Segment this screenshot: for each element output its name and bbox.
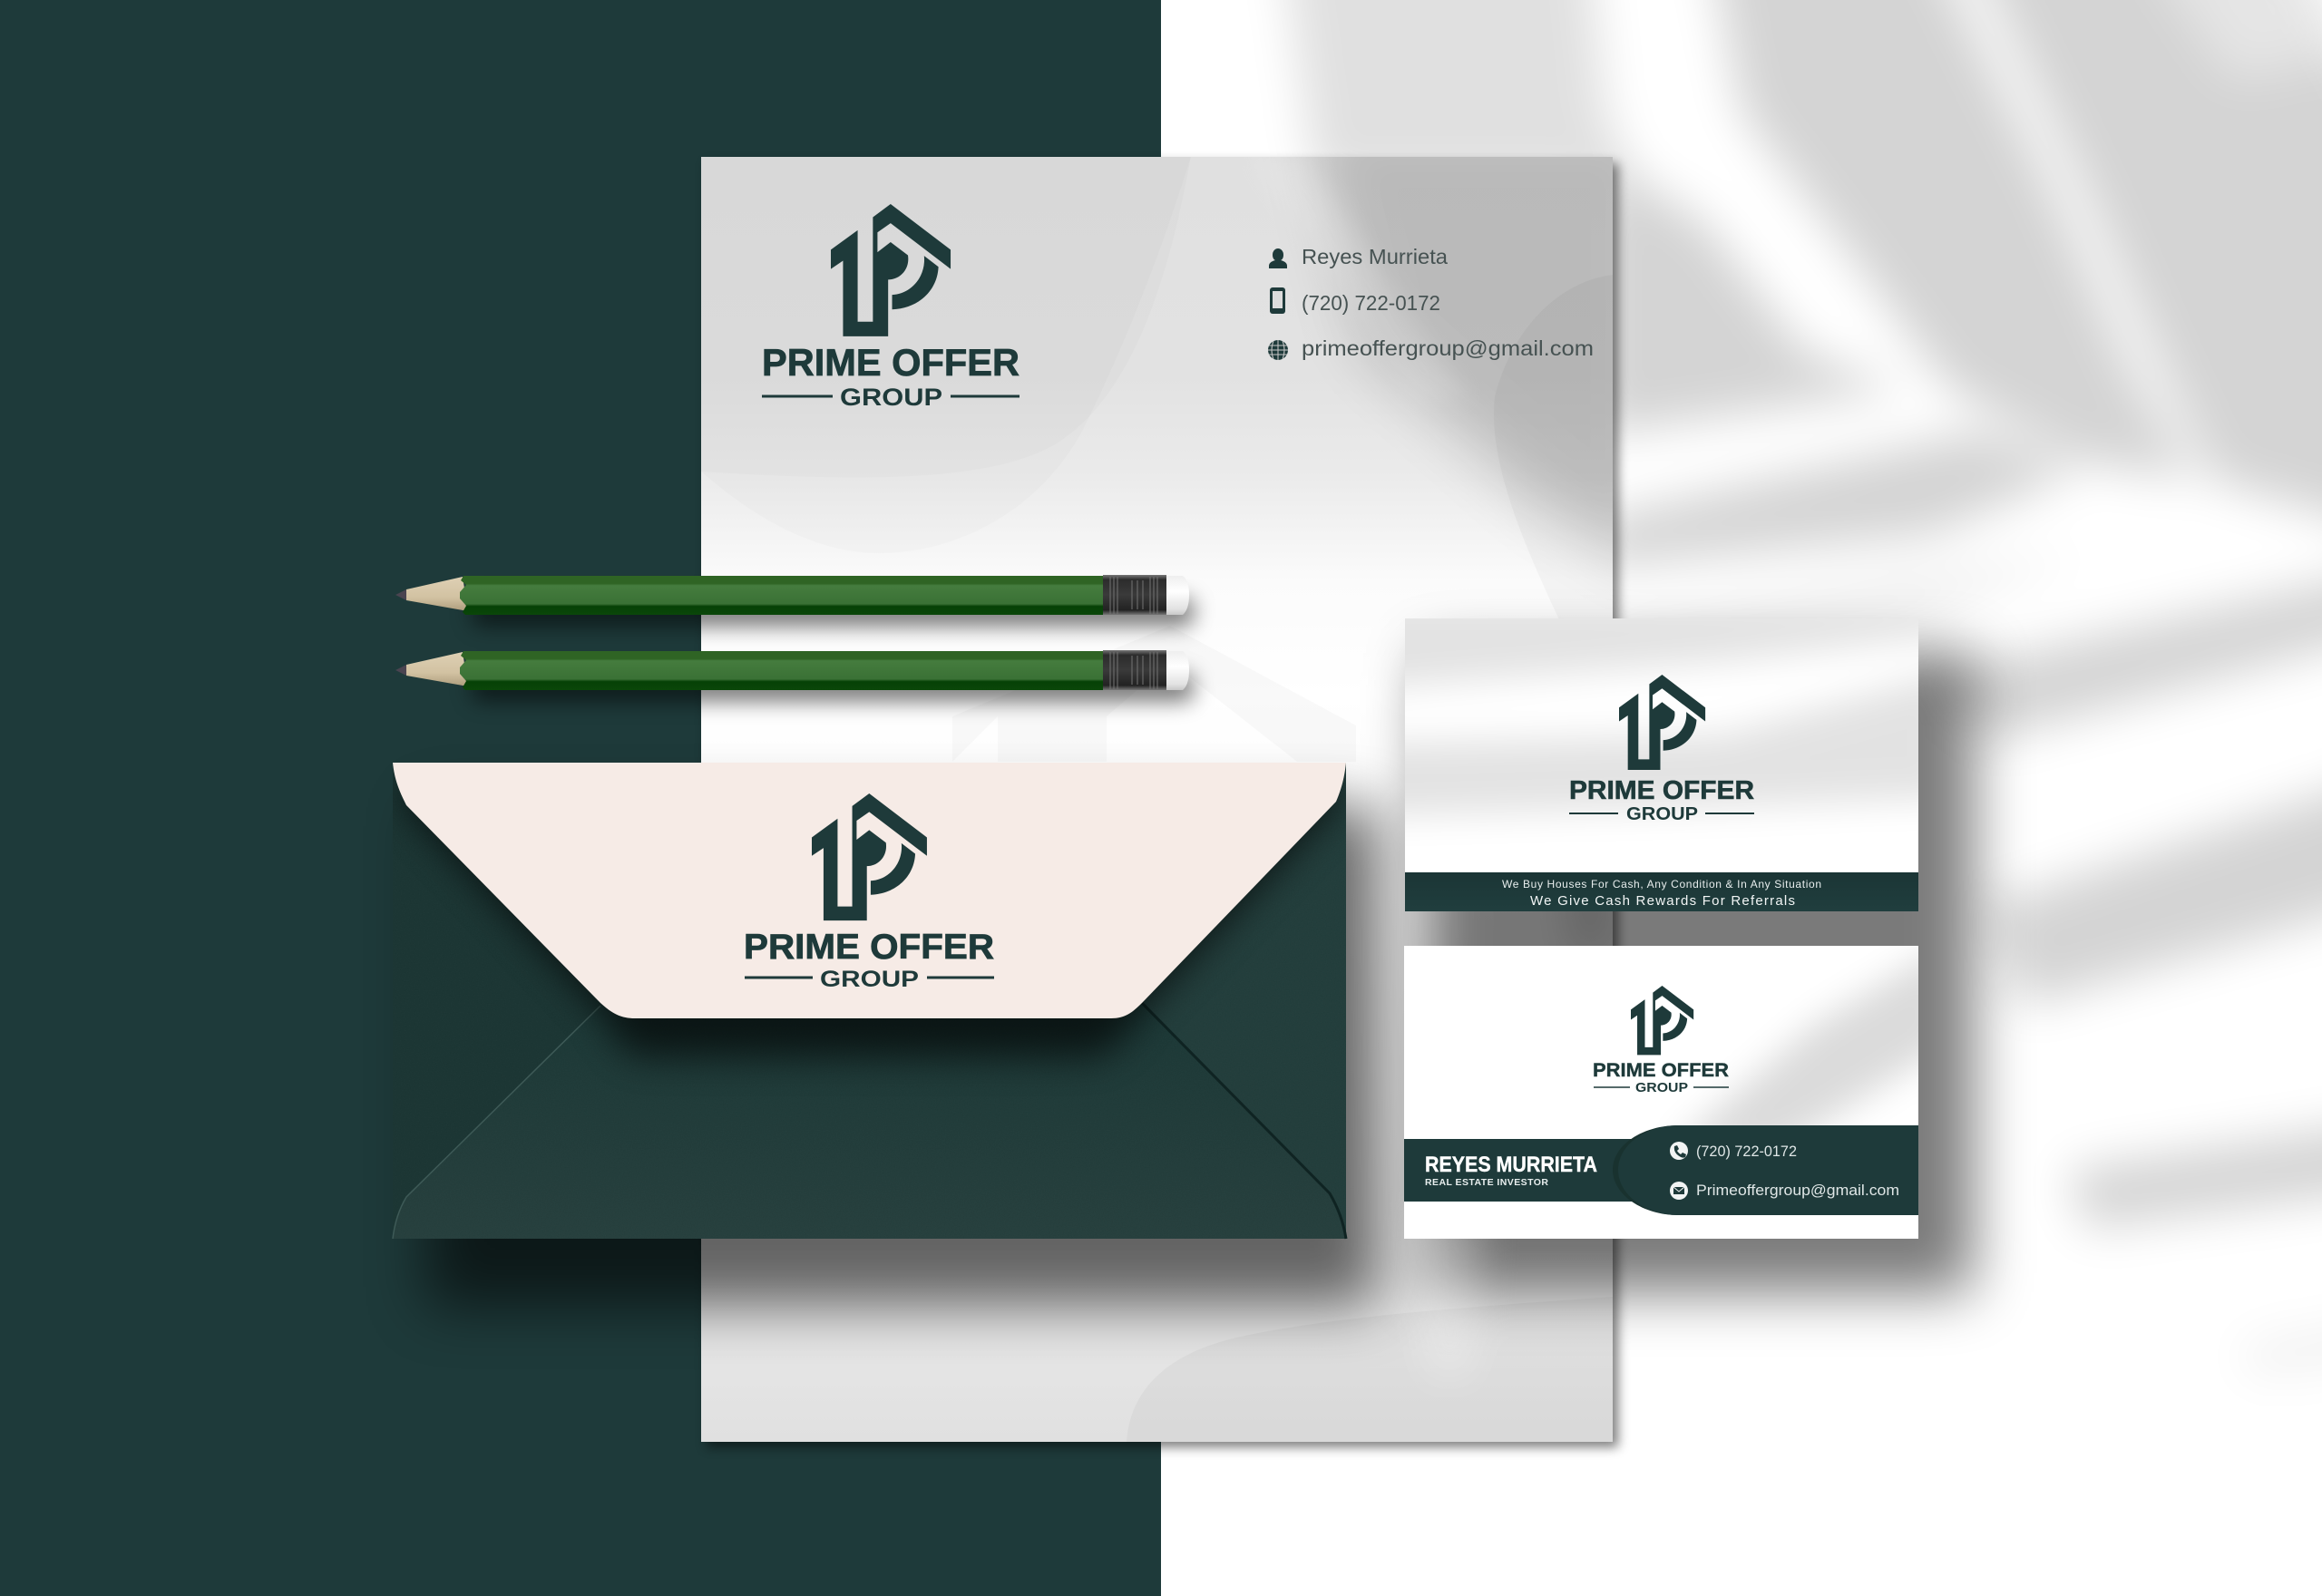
letterhead curve: bottom-right lobe: [1127, 1297, 1613, 1442]
pencil: bottom: [395, 650, 1189, 690]
card logo: [1593, 986, 1729, 1095]
icon: email badge: [1670, 1182, 1688, 1200]
tagline: referrals: We Give Cash Rewards For Referrals: [1530, 893, 1795, 909]
palm leaf shadow: [1279, 0, 2322, 1378]
background: dark green left half: [0, 0, 1161, 1596]
card paper: [1404, 946, 1918, 1239]
email: primeoffergroup@gmail.com: [1302, 336, 1594, 360]
letterhead light streak through shadow: [1415, 1239, 1497, 1339]
envelope flap: [393, 763, 1346, 1018]
envelope side flaps: [1142, 763, 1346, 1239]
letterhead logo: [762, 204, 1020, 411]
letterhead curve: right lobe: [1494, 275, 1613, 626]
wordmark: PRIME OFFER: PRIME OFFER: [1593, 1060, 1729, 1081]
icon: logo mark: [1631, 986, 1693, 1055]
name: Reyes Murrieta: [1302, 245, 1448, 268]
name: REYES MURRIETA: [1425, 1153, 1597, 1177]
contact pill: [1618, 1125, 1918, 1215]
wordmark: GROUP: GROUP: [1635, 1080, 1688, 1095]
email: Primeoffergroup@gmail.com: [1696, 1182, 1899, 1199]
letterhead contact details: [1268, 245, 1594, 360]
panel: business card back: [1404, 943, 1950, 1239]
card logo: [1569, 675, 1754, 824]
tagline: buy houses: We Buy Houses For Cash, Any Condition & In Any Situation: [1502, 878, 1821, 890]
icon: globe: [1268, 340, 1288, 360]
background: white right half: [1161, 0, 2322, 1596]
envelope body: [393, 763, 1346, 1239]
letterhead curve: lower lobe: [701, 157, 1191, 553]
envelope logo: [744, 793, 994, 992]
palm shadow: top highlight: [2179, 0, 2322, 73]
letterhead shade: right bottom strip: [1567, 911, 1613, 943]
envelope paper grain: [393, 763, 1346, 1239]
letterhead drop shadow: [707, 163, 1618, 1447]
icon: phone badge: [1670, 1142, 1688, 1160]
wordmark: PRIME OFFER: PRIME OFFER: [744, 928, 994, 967]
wordmark rules: [1594, 1086, 1729, 1088]
name band: [1404, 1139, 1649, 1202]
icon: logo mark: [831, 204, 951, 336]
icon: logo mark: [1619, 675, 1705, 770]
icon: phone: [1270, 287, 1285, 314]
wordmark rules: [745, 976, 994, 979]
icon: logo mark: [812, 793, 927, 920]
envelope fold line left: [393, 1006, 600, 1239]
pencil shadows: [472, 598, 1194, 701]
wordmark rules: [1569, 813, 1754, 814]
business cards drop shadow: [1424, 653, 1973, 1292]
card palm shade: [1405, 618, 1918, 823]
panel: business card front: [1405, 618, 1918, 911]
letterhead highlight streak: [1342, 240, 1444, 386]
wordmark: GROUP: GROUP: [840, 384, 942, 411]
icon: person: [1269, 248, 1287, 268]
card paper: [1405, 618, 1918, 873]
wordmark: GROUP: GROUP: [1626, 804, 1698, 824]
wordmark: GROUP: GROUP: [820, 967, 919, 992]
letterhead shade: upper right: [1297, 157, 1613, 575]
wordmark rules: [762, 395, 1020, 397]
card palm shade: [1685, 949, 1918, 1125]
card tagline band: [1405, 872, 1918, 911]
panel: envelope: [393, 763, 1346, 1239]
faint logo watermark on letterhead: [952, 626, 1356, 762]
pencil: top: [395, 575, 1189, 615]
letterhead curve: top-left lobe: [701, 157, 1191, 478]
flap cast shadow: [394, 780, 1346, 1056]
phone number: (720) 722-0172: [1302, 291, 1440, 315]
phone number: (720) 722-0172: [1696, 1143, 1797, 1160]
envelope drop shadow: [426, 807, 1379, 1306]
wordmark: PRIME OFFER: PRIME OFFER: [762, 341, 1020, 384]
wordmark: PRIME OFFER: PRIME OFFER: [1569, 776, 1754, 805]
job title: REAL ESTATE INVESTOR: [1425, 1177, 1548, 1188]
panel: letterhead: [701, 118, 1660, 1442]
contact pill shadow: [1613, 1125, 1918, 1215]
envelope fold line right: [1142, 1003, 1346, 1239]
